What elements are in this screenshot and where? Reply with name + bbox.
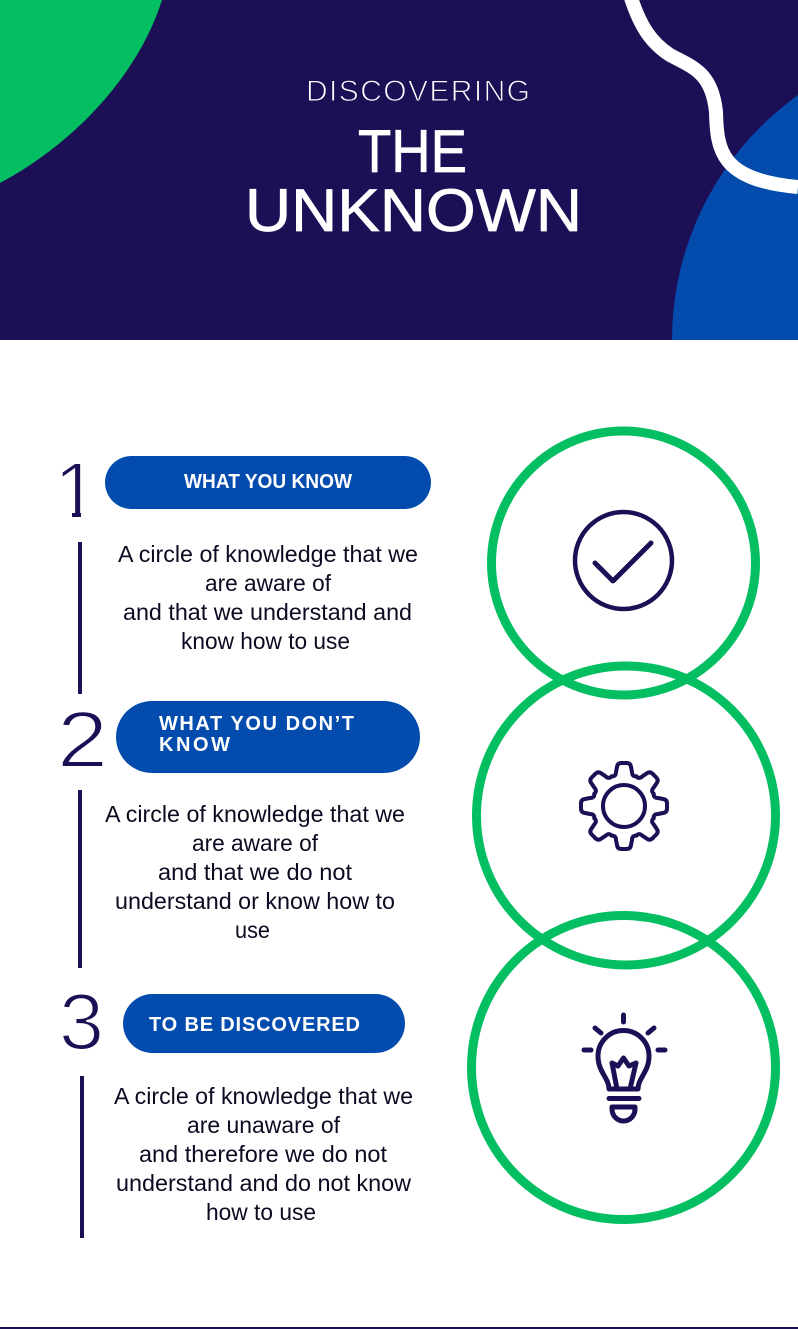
description 1 (118, 541, 418, 654)
green circle 2 (476, 666, 776, 965)
section 3: to be discovered (59, 977, 413, 1238)
description 2: understand or know how to (115, 888, 395, 914)
title: THE (358, 118, 467, 185)
description 1: and that we understand and (123, 599, 412, 625)
pill heading 3 (123, 994, 405, 1053)
blue corner circle (672, 95, 798, 340)
green corner circle (0, 0, 162, 183)
number 3: 3 (59, 977, 104, 1066)
icon: check mark in circle (575, 512, 672, 609)
title: UNKNOWN (245, 177, 582, 244)
icon: gear (581, 763, 667, 849)
section 1: what you know (54, 446, 431, 694)
number 2: 2 (57, 695, 108, 784)
description 3: are unaware of (187, 1112, 341, 1138)
description 3: and therefore we do not (139, 1141, 388, 1167)
description 1: A circle of knowledge that we (118, 541, 418, 567)
pill heading 2: KNOW (159, 734, 230, 756)
title (250, 80, 578, 232)
description 2: are aware of (192, 830, 319, 856)
pill heading 2 (116, 701, 420, 773)
title: DISCOVERING (306, 75, 530, 108)
description 2: and that we do not (158, 859, 353, 885)
vertical bar 1 (78, 542, 82, 694)
description 3 (114, 1083, 413, 1225)
description 2: use (235, 917, 270, 943)
white wave line (631, 0, 798, 187)
description 3: understand and do not know (116, 1170, 411, 1196)
section 2: what you don't know (57, 695, 420, 968)
vertical bar 2 (78, 790, 82, 968)
description 1: are aware of (205, 570, 332, 596)
header banner (0, 0, 798, 340)
pill heading 1: WHAT YOU KNOW (184, 471, 352, 493)
number 1: 1 (54, 446, 98, 535)
pill heading 1 (105, 456, 431, 509)
pill heading 3: TO BE DISCOVERED (149, 1014, 360, 1036)
icon: light bulb (584, 1015, 665, 1121)
green circle 3 (472, 916, 776, 1220)
pill heading 2: WHAT YOU DON’T (159, 713, 354, 735)
green circle 1 (492, 431, 756, 695)
description 2: A circle of knowledge that we (105, 801, 405, 827)
description 3: A circle of knowledge that we (114, 1083, 413, 1109)
description 3: how to use (206, 1199, 316, 1225)
description 2 (105, 801, 405, 943)
vertical bar 3 (80, 1076, 84, 1238)
description 1: know how to use (181, 628, 350, 654)
bottom rule (0, 1327, 798, 1329)
